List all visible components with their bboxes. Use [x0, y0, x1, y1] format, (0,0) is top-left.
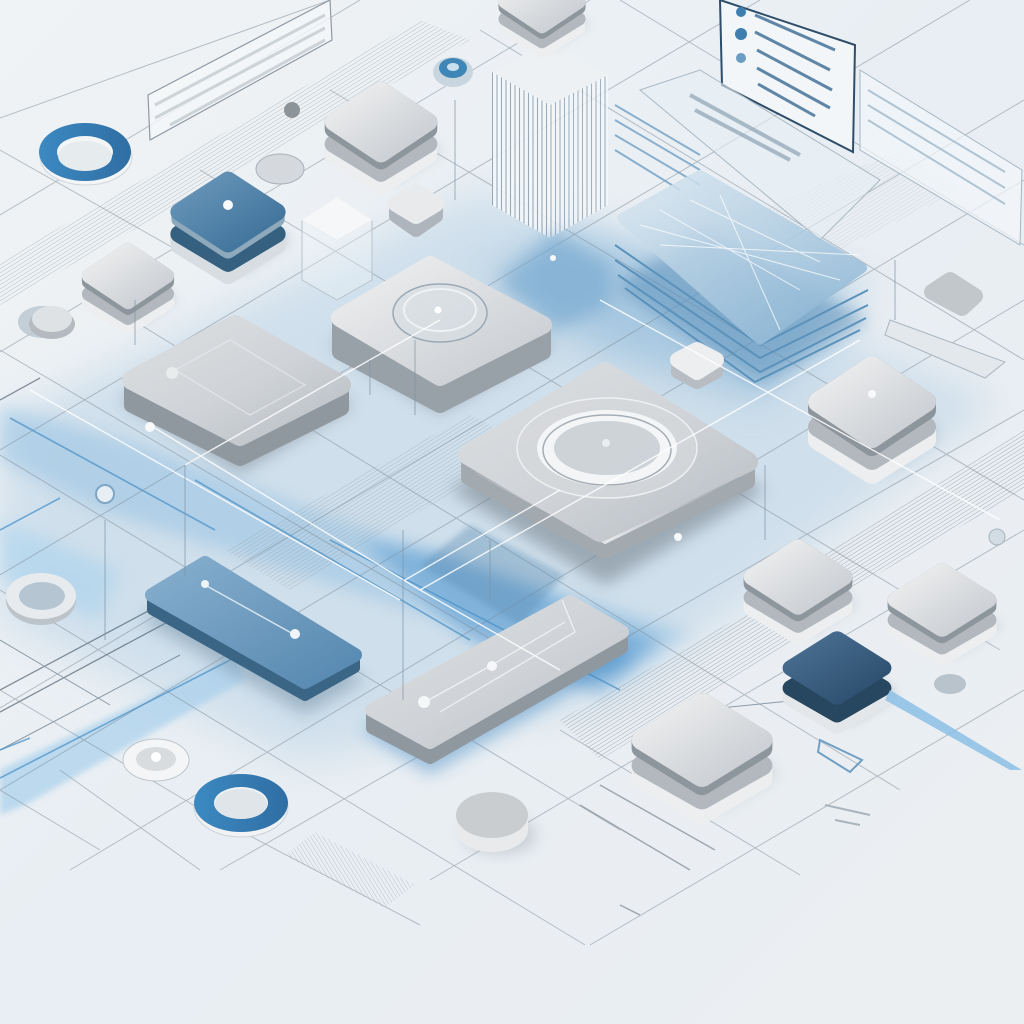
ring: upper left [39, 123, 132, 185]
stack: right [818, 366, 940, 474]
blue lines along the band [0, 418, 620, 778]
grey bar plate [362, 600, 632, 775]
stack: lower right 2 [896, 571, 1000, 658]
round button: bottom [456, 792, 536, 853]
stack: dark [791, 639, 895, 726]
white cube [302, 197, 372, 300]
small rounded block [396, 192, 436, 230]
dark glass block: below centre [420, 525, 565, 625]
label tag: right [885, 320, 1005, 378]
blue streak: right [885, 690, 1022, 770]
stack: left [89, 250, 177, 328]
document panel: top right [720, 0, 855, 152]
hatched band: right [815, 430, 1024, 590]
node dots [145, 200, 876, 541]
stack: blue upper left [179, 180, 289, 275]
vertical glass edges [105, 100, 895, 700]
small markers: lower right [96, 485, 1005, 825]
disc: lower left [123, 739, 189, 781]
hatched band: upper left [0, 20, 470, 305]
stack: bottom [643, 703, 777, 813]
knob: left [18, 306, 75, 339]
glass panel: right [860, 70, 1022, 245]
plate: left large [120, 325, 353, 472]
stack: upper centre left [333, 90, 441, 185]
small stack: top centre [505, 0, 588, 51]
small cube: centre right [678, 350, 716, 382]
ring on centre plate [517, 398, 697, 498]
plate: centre large [450, 372, 765, 585]
blue glass stack [615, 175, 868, 385]
white connector lines [30, 300, 1000, 670]
hatched band: upper right [760, 150, 960, 260]
plate: centre with lens [330, 265, 553, 412]
blue wash: floor glow [0, 190, 1000, 815]
hatched band: lower centre [560, 600, 810, 760]
small pebble: right [932, 280, 975, 308]
ring: bottom [194, 774, 288, 837]
blue bar plate [142, 563, 365, 715]
footnote lines: lower centre [580, 785, 715, 915]
hatched label: bottom [285, 832, 415, 908]
small button: blue dot [433, 57, 473, 87]
glass panel: upper left [148, 0, 332, 140]
glass panel: behind centre [615, 70, 880, 240]
blue glass tile [500, 232, 612, 330]
striped glass tower [492, 40, 608, 238]
disc: left [6, 573, 76, 625]
stack: lower right 1 [752, 547, 856, 636]
hatched band: centre left [225, 415, 530, 590]
pill: upper [256, 102, 304, 184]
